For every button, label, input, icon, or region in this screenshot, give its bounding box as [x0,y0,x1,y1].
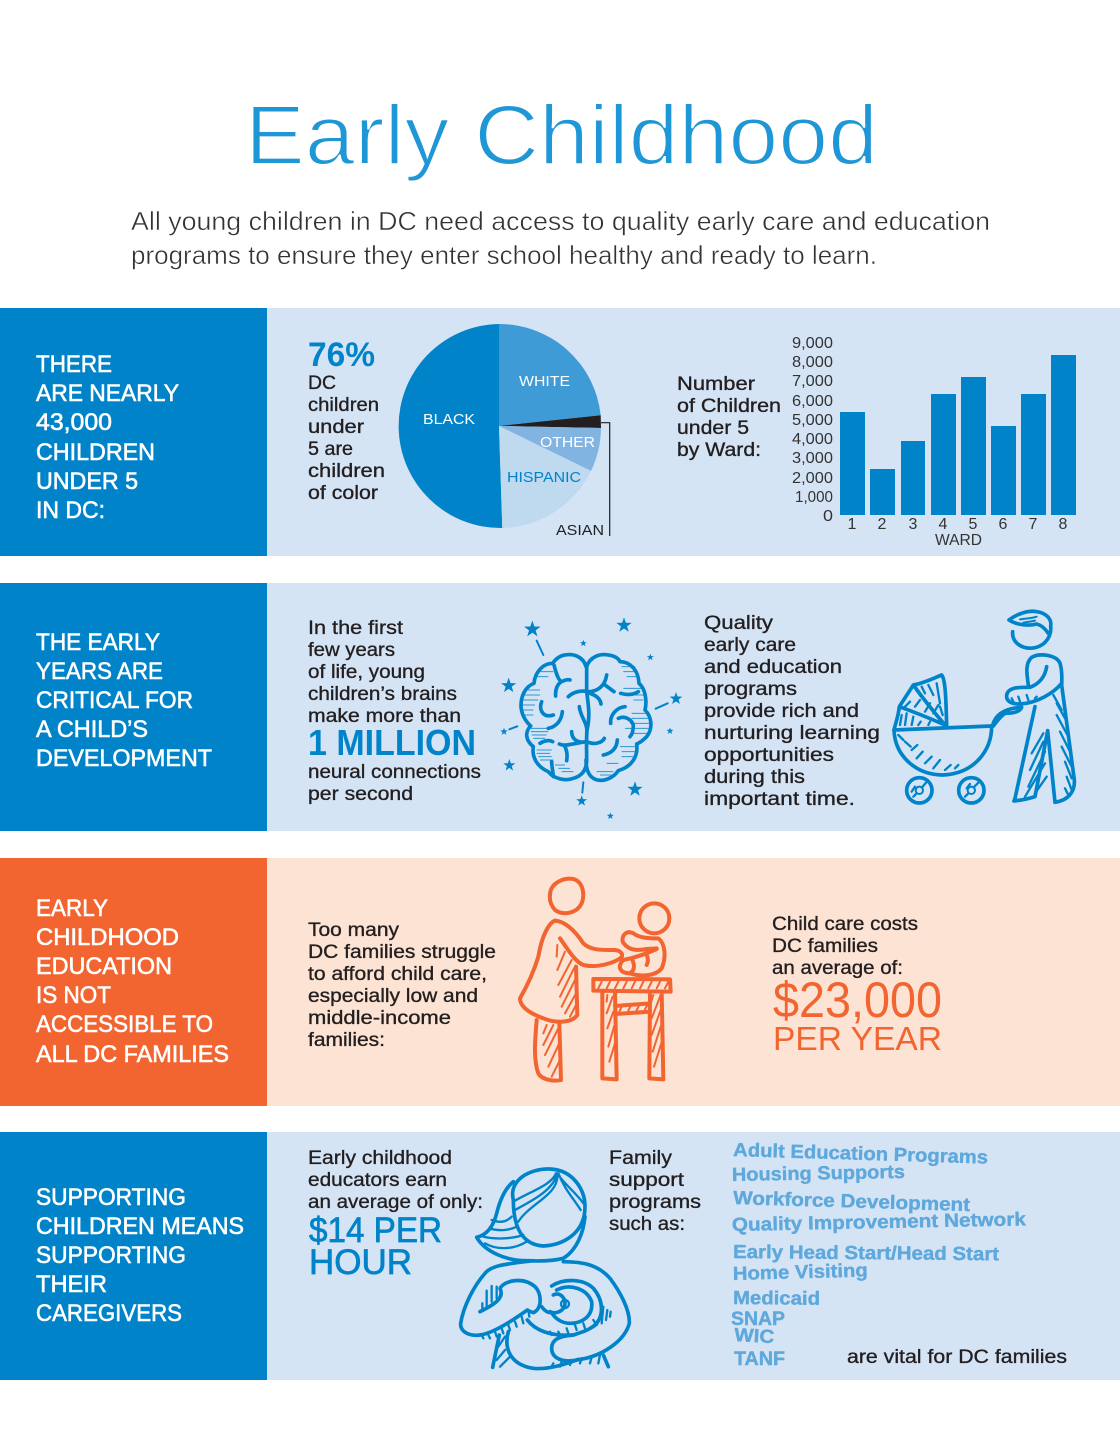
heading: not accessible: ACCESSIBLE TO [36,1011,213,1038]
list: support programs: Quality Improvement Network [732,1209,1027,1236]
stat: 76% children of color: children [308,460,385,482]
text: families struggle: Too many [308,919,399,941]
bar chart: children by ward: 4 [939,516,948,533]
text: vital for DC families: are vital for DC families [847,1346,1067,1368]
bar chart: children by ward: 5 [969,516,978,533]
text: 1 million neural connections: 1 MILLION [308,722,476,763]
list: support programs: Early Head Start/Head Start [733,1242,1000,1265]
list: support programs: Housing Supports [732,1162,905,1186]
stat: educator pay: an average of only: [308,1191,483,1213]
list: support programs: Home Visiting [733,1260,868,1285]
heading: early years [36,629,212,772]
stat: child care cost: PER YEAR [773,1020,942,1057]
stat: 76% children of color: under [308,416,365,438]
heading: not accessible [36,895,229,1068]
icon: caregiver with toddler [520,879,671,1081]
text: 1 million neural connections [308,617,481,805]
text: quality early care: programs [704,678,797,700]
heading: supporting children: CAREGIVERS [36,1300,182,1327]
heading: not accessible: CHILDHOOD [36,924,179,951]
text: family support programs: Family [609,1147,672,1169]
heading: supporting children: SUPPORTING [36,1242,186,1269]
bar chart: children by ward: WARD [935,532,982,549]
text: families struggle: middle-income [308,1007,451,1029]
heading: nearly 43,000 children: UNDER 5 [36,468,138,495]
text: 1 million neural connections: few years [308,639,395,661]
panel: children under 5 in DC [0,308,1120,556]
bar chart: children by ward: 7 [1029,516,1038,533]
bar chart: children by ward: 8,000 [792,354,833,371]
heading: supporting children [36,1184,244,1327]
text: 1 million neural connections: make more than [308,705,461,727]
panel: accessibility of child care [0,858,1120,1106]
pie chart: race and ethnicity: BLACK [423,411,475,428]
bar chart: children by ward: 3,000 [792,450,833,467]
stat: 76% children of color: 5 are [308,438,353,460]
bar chart: children by ward: 1 [848,516,857,533]
heading: early years: A CHILD’S [36,716,148,743]
bar chart: children by ward: 7,000 [792,373,833,390]
text: family support programs: such as: [609,1213,685,1235]
bar chart: children by ward: 3 [909,516,918,533]
text: families struggle [308,919,496,1051]
heading: nearly 43,000 children: THERE [36,351,112,378]
stat: 76% children of color [308,336,385,504]
text: family support programs: support [609,1169,685,1191]
heading: nearly 43,000 children: 43,000 [36,409,112,436]
heading: not accessible: ALL DC FAMILIES [36,1041,229,1068]
list: support programs [731,1140,1027,1370]
bar chart: children by ward: 6 [999,516,1008,533]
label: number of children by ward: Number [677,373,756,395]
text: quality early care: during this [704,766,805,788]
stat: educator pay: $14 PER [309,1211,442,1250]
heading: nearly 43,000 children: CHILDREN [36,439,155,466]
text: quality early care: opportunities [704,744,834,766]
heading: supporting children: THEIR [36,1271,107,1298]
bar chart: children by ward: 2 [878,516,887,533]
intro text [131,206,990,270]
stat: 76% children of color: DC [308,372,336,394]
heading: early years: DEVELOPMENT [36,745,212,772]
bar chart: children by ward: 2,000 [792,470,833,487]
icon: caregiver holding baby [461,1169,629,1369]
heading: not accessible: EDUCATION [36,953,172,980]
text: quality early care [704,612,880,810]
text: 1 million neural connections: In the first [308,617,404,639]
pie chart: race and ethnicity: OTHER [540,434,595,451]
list: support programs: WIC [734,1325,775,1348]
heading: nearly 43,000 children [36,351,179,524]
list: support programs: Medicaid [733,1288,820,1310]
bar chart: children by ward: 8 [1059,516,1068,533]
heading: nearly 43,000 children: IN DC: [36,497,105,524]
stat: educator pay [308,1147,483,1282]
bar chart: children by ward: 4,000 [792,431,833,448]
stat: educator pay: Early childhood [308,1147,452,1169]
intro text: programs to ensure they enter school healthy and ready to learn. [131,240,877,270]
heading: not accessible: EARLY [36,895,108,922]
heading: early years: YEARS ARE [36,658,163,685]
intro text: All young children in DC need access to quality early care and education [131,206,990,236]
label: number of children by ward: under 5 [677,417,749,439]
list: support programs: TANF [734,1349,785,1370]
text: 1 million neural connections: children’s brains [308,683,457,705]
pie chart: race and ethnicity [399,324,610,539]
text: quality early care: Quality [704,612,773,634]
text: quality early care: provide rich and [704,700,859,722]
pie chart: race and ethnicity: WHITE [519,373,570,390]
stat: 76% children of color: 76% [308,336,375,374]
text: families struggle: especially low and [308,985,478,1007]
pie chart: race and ethnicity: ASIAN [556,522,604,539]
text: quality early care: early care [704,634,796,656]
heading: supporting children: CHILDREN MEANS [36,1213,244,1240]
text: family support programs: programs [609,1191,701,1213]
heading: not accessible: IS NOT [36,982,111,1009]
list: support programs: Adult Education Programs [733,1140,988,1169]
bar chart: children by ward: 1,000 [795,489,833,506]
text: quality early care: important time. [704,788,855,810]
heading: supporting children: SUPPORTING [36,1184,186,1211]
heading: early years: THE EARLY [36,629,160,656]
text: 1 million neural connections: of life, young [308,661,425,683]
stat: 76% children of color: of color [308,482,379,504]
pie chart: race and ethnicity: HISPANIC [507,469,581,486]
icon: brain with stars [500,617,682,819]
text: quality early care: and education [704,656,842,678]
label: number of children by ward: by Ward: [677,439,761,461]
bar chart: children by ward: 5,000 [792,412,833,429]
text: families struggle: families: [308,1029,385,1051]
stat: educator pay: educators earn [308,1169,447,1191]
stat: educator pay: HOUR [309,1243,412,1282]
stat: 76% children of color: children [308,394,379,416]
label: number of children by ward [677,373,781,461]
title: Early Childhood [245,88,878,182]
list: support programs: SNAP [731,1309,785,1330]
bar chart: children by ward: 0 [823,508,833,525]
stat: child care cost [772,913,942,1057]
icon: parent with stroller [894,611,1074,803]
text: family support programs [609,1147,701,1235]
label: number of children by ward: of Children [677,395,781,417]
heading: nearly 43,000 children: ARE NEARLY [36,380,179,407]
text: quality early care: nurturing learning [704,722,880,744]
text: families struggle: to afford child care, [308,963,487,985]
text: 1 million neural connections: per second [308,783,413,805]
heading: early years: CRITICAL FOR [36,687,193,714]
bar chart: children by ward [792,335,1076,549]
bar chart: children by ward: 6,000 [792,393,833,410]
stat: child care cost: $23,000 [773,972,942,1028]
panel: early years critical [0,583,1120,831]
panel: supporting caregivers [0,1132,1120,1380]
stat: child care cost: Child care costs [772,913,918,935]
stat: child care cost: DC families [772,935,878,957]
text: families struggle: DC families struggle [308,941,496,963]
text: 1 million neural connections: neural connections [308,761,481,783]
stat: child care cost: an average of: [772,957,903,979]
list: support programs: Workforce Development [733,1188,971,1216]
bar chart: children by ward: 9,000 [792,335,833,352]
